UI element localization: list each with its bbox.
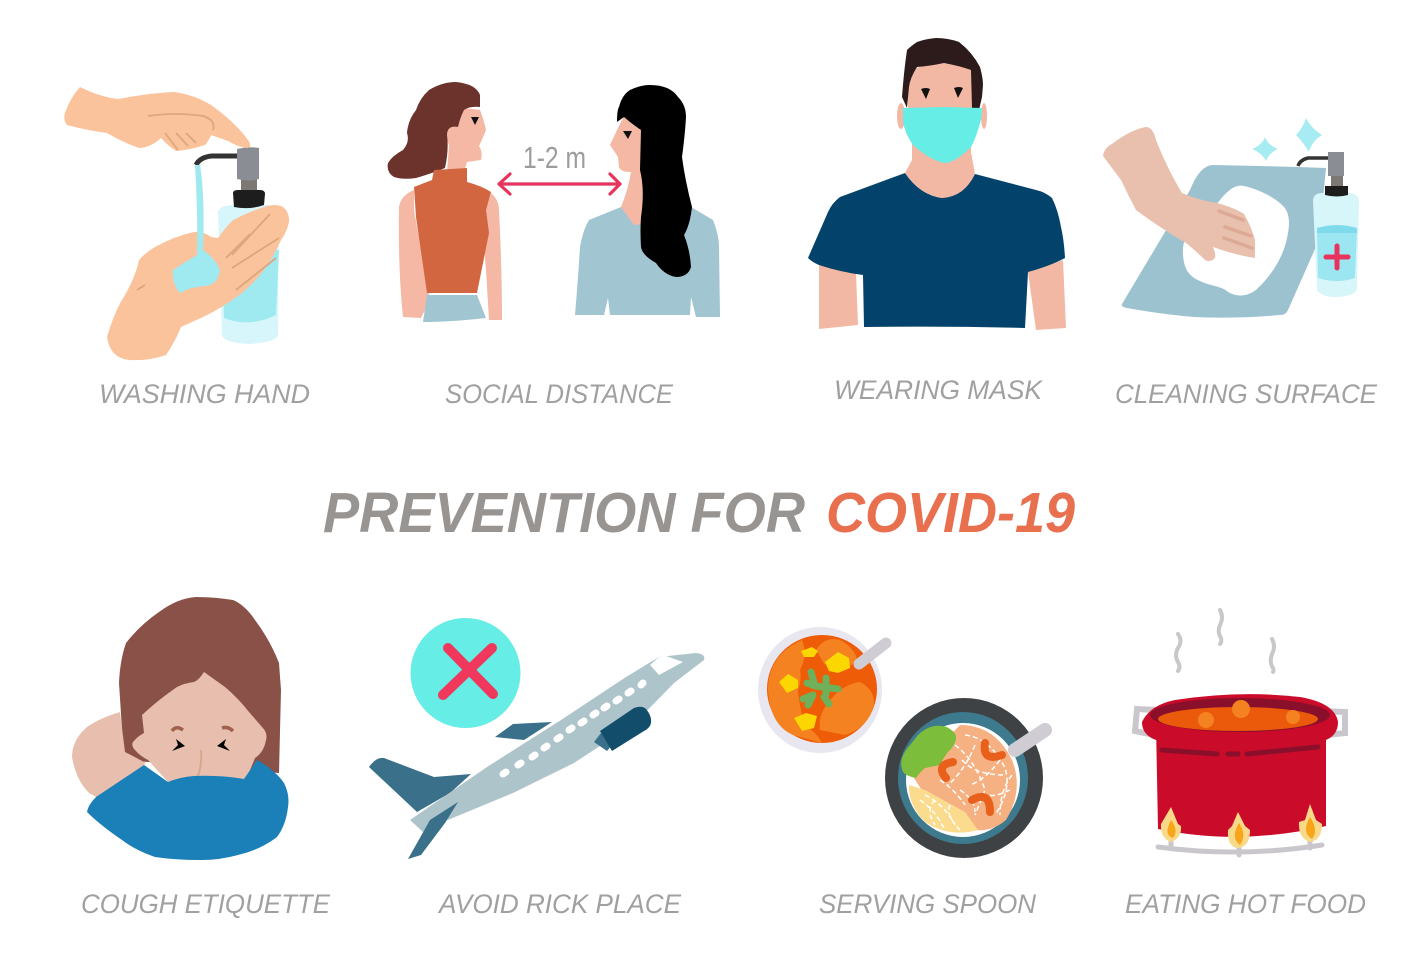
- panel: avoid risk place: [369, 618, 704, 919]
- label: eating hot food: EATING HOT FOOD: [1125, 889, 1366, 919]
- pot handles: [1135, 709, 1345, 735]
- icon: sanitizer bottle: [1298, 152, 1359, 297]
- raised arm: [72, 712, 146, 803]
- title: COVID-19: [826, 481, 1075, 545]
- soap stream and puddle: [173, 165, 220, 293]
- label: wearing mask: WEARING MASK: [834, 375, 1043, 405]
- title: [323, 481, 1075, 545]
- label: serving spoon: SERVING SPOON: [819, 889, 1036, 919]
- cleaning cloth: [1183, 186, 1289, 295]
- closed eyes and brows: [172, 739, 230, 751]
- icon: face mask: [903, 107, 982, 163]
- flames: [1161, 804, 1322, 848]
- face: [132, 672, 266, 782]
- hand crease lines: [137, 114, 279, 290]
- soup bowl: [758, 627, 886, 753]
- panel: eating hot food: [1125, 610, 1366, 919]
- icon: lower hand: [107, 205, 289, 360]
- label: avoid rick place: AVOID RICK PLACE: [437, 889, 682, 919]
- noodle bowl: [885, 698, 1045, 858]
- long brown hair: [119, 597, 281, 773]
- man figure: [808, 38, 1066, 330]
- icon: sanitizer bottle: [196, 147, 279, 344]
- panel: washing hand: [64, 87, 310, 409]
- title: PREVENTION FOR: [323, 481, 805, 545]
- icon: sparkles: [1252, 118, 1322, 161]
- label: washing hand: WASHING HAND: [99, 379, 310, 409]
- icon: red pot: [1142, 694, 1338, 837]
- icon: wiping arm: [1103, 127, 1255, 261]
- icon: airplane: [369, 653, 704, 859]
- blue sleeve: [87, 760, 288, 860]
- nose line: [198, 750, 201, 776]
- distance label: 1-2 m: [523, 140, 586, 175]
- stove rail: [1158, 835, 1322, 855]
- surface: [1122, 165, 1326, 318]
- panel: wearing mask: [808, 38, 1066, 405]
- finger lines: [1219, 211, 1252, 248]
- panel: cough etiquette: [72, 597, 331, 919]
- panel: cleaning surface: [1103, 118, 1378, 409]
- label: social distance: SOCIAL DISTANCE: [445, 379, 674, 409]
- woman with black hair: [575, 85, 720, 317]
- distance arrow: [499, 174, 620, 194]
- woman with brown hair: [388, 82, 502, 322]
- label: cleaning surface: CLEANING SURFACE: [1115, 379, 1378, 409]
- steam: [1176, 610, 1274, 672]
- panel: social distance: [388, 82, 720, 409]
- label: cough etiquette: COUGH ETIQUETTE: [81, 889, 331, 919]
- no-travel badge: [410, 618, 520, 728]
- icon: upper hand pressing pump: [64, 87, 250, 151]
- panel: serving spoon: [758, 627, 1045, 919]
